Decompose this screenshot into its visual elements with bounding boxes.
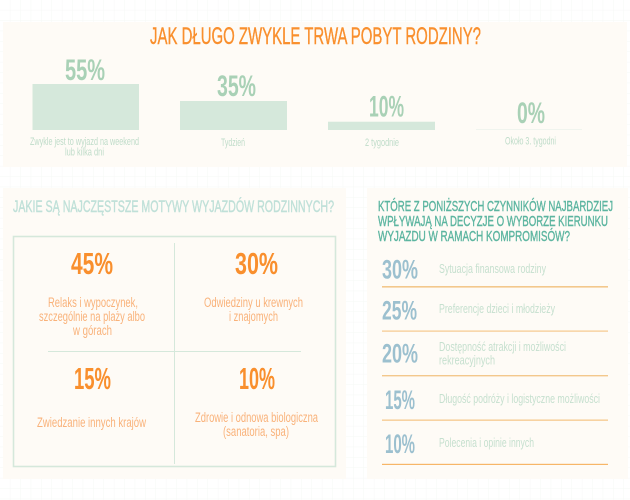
motive: 45%: Relaks i wypoczynek, [48,295,138,310]
motive: 45%: szczególnie na plaży albo [39,309,145,324]
bar: 55%: 55% [65,54,105,87]
motive: 30% [204,246,303,324]
factors heading [378,197,613,245]
factor: 15%: 15% [385,385,415,415]
bar: 10% [328,90,435,149]
panel: factors [367,188,628,479]
bar: 55%: Zwykle jest to wyjazd na weekend [30,136,139,148]
bar: 10%: 10% [369,90,404,124]
motive: 30%: Odwiedziny u krewnych [204,295,303,310]
factor: 30%: Sytuacja finansowa rodziny [439,261,546,276]
factor: 10% [382,429,608,465]
motive: 30%: 30% [235,246,278,281]
bar: 55%: lub kilka dni [65,146,104,158]
motive: 15%: Zwiedzanie innych krajów [37,415,146,430]
motive: 45% [39,246,145,338]
motive: 15%: 15% [74,361,111,396]
factor: 30% [382,254,608,288]
factor: 20%: Dostępność atrakcji i możliwości [439,339,566,354]
motive: 10%: Zdrowie i odnowa biologiczna [195,410,318,425]
bar: 35%: Tydzień [221,137,245,149]
motives frame [14,236,336,466]
bar: 35% [180,70,287,149]
factor: 20% [382,338,608,376]
factor: 10%: Polecenia i opinie innych [439,435,534,450]
motive: 10%: (sanatoria, spa) [223,424,289,439]
factor: 20%: rekreacyjnych [439,352,495,368]
factor: 20%: 20% [382,338,418,368]
factor: 25% [382,296,608,332]
panel: motives [3,188,346,479]
bar: 35%: 35% [217,70,256,103]
factor: 25%: 25% [382,296,417,326]
panel: length of stay [3,22,627,167]
motive: 10% [195,361,318,439]
motive: 45%: 45% [71,246,113,281]
motive: 10%: 10% [239,361,275,396]
bar: 0%: 0% [517,97,545,130]
factor: 30%: 30% [382,254,418,284]
bar: 10%: 2 tygodnie [365,137,399,149]
factor: 25%: Preferencje dzieci i młodzieży [439,301,555,316]
motives heading: JAKIE SĄ NAJCZĘSTSZE MOTYWY WYJAZDÓW RODZINNYCH? [13,197,334,216]
factor: 15% [382,385,608,421]
bar: 0%: Około 3. tygodni [505,136,556,148]
motive: 45%: w górach [72,323,112,338]
motive: 30%: i znajomych [229,309,278,324]
bar: 55% [30,54,139,158]
motive: 15% [37,361,146,430]
bar: 0% [476,97,582,148]
factor: 10%: 10% [385,429,415,459]
